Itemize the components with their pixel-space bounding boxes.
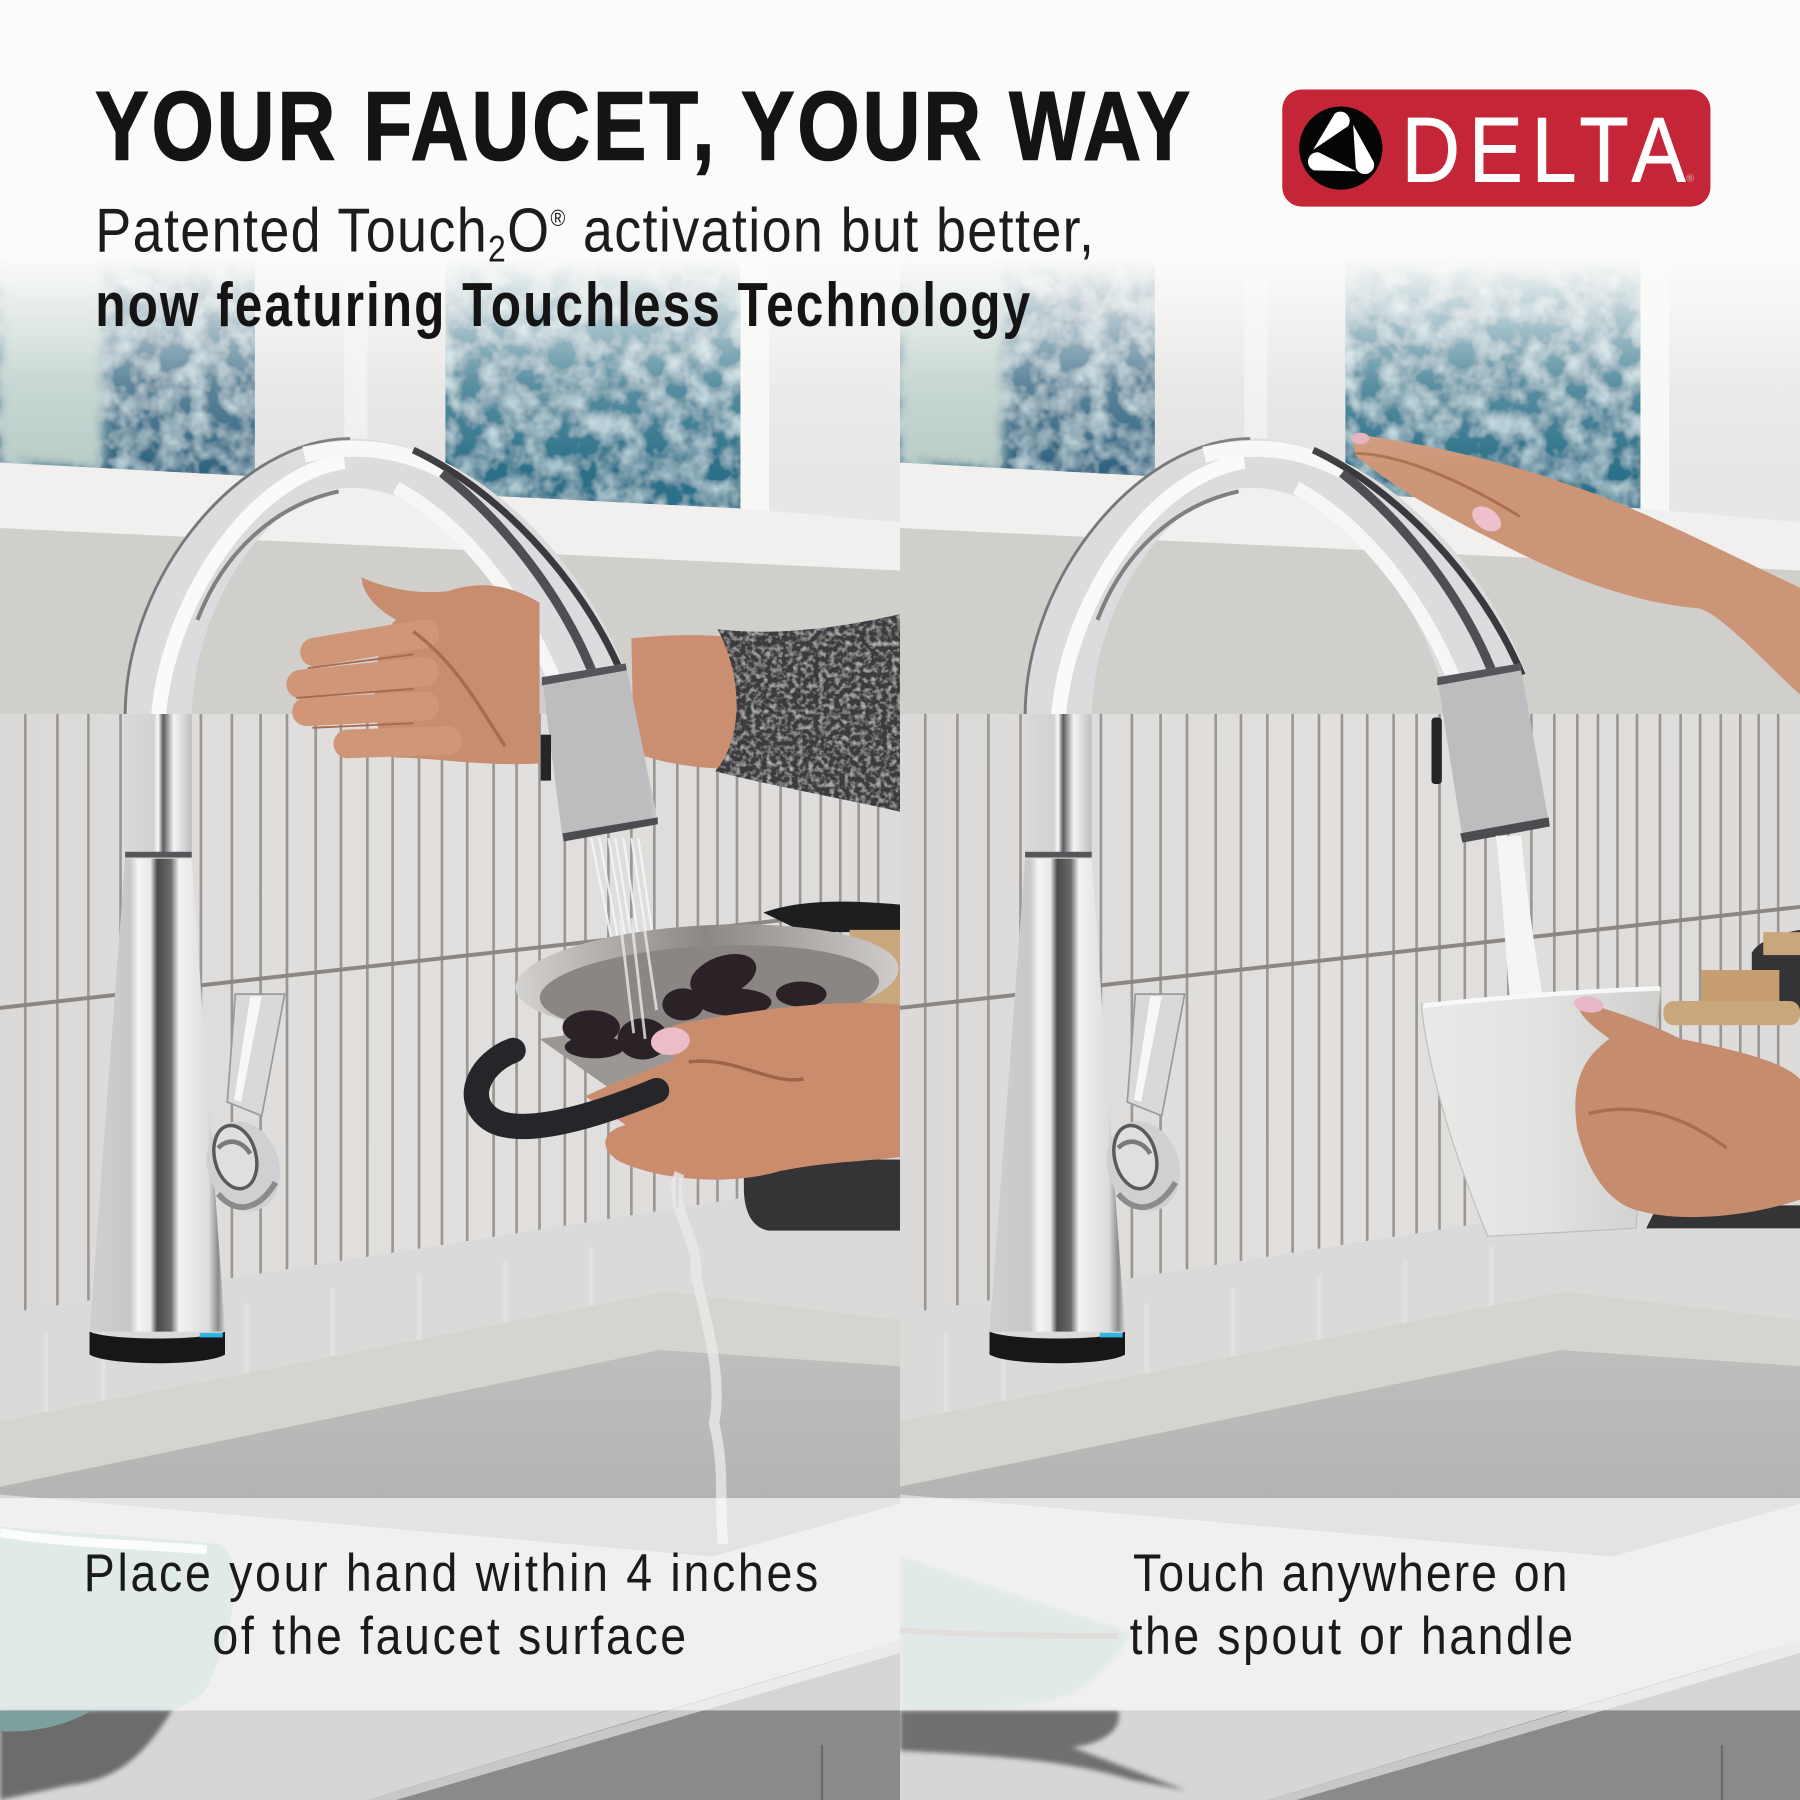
registered mark: ® [1686, 173, 1694, 184]
caption right: Touch anywhere on [1133, 1543, 1567, 1603]
spout head right [1432, 664, 1550, 843]
icon: faucet [990, 439, 1526, 1363]
panel: left photo, hand within 4 inches of faucet [0, 266, 900, 1800]
subtitle line one: O [507, 196, 549, 265]
subtitle line two: now featuring Touchless Technology [95, 270, 1030, 339]
caption band left [0, 1498, 900, 1710]
logo wordmark: DELTA [1402, 100, 1686, 202]
white mug [1421, 987, 1661, 1236]
caption right: the spout or handle [1130, 1606, 1573, 1666]
top fade panel [0, 0, 1800, 482]
pot and dark box on counter [744, 902, 900, 1231]
spray over berries [620, 918, 657, 1039]
subtitle line one: ® [550, 206, 565, 231]
spout head left [541, 664, 658, 841]
caption right [1130, 1543, 1573, 1666]
hand under sensor [296, 577, 900, 812]
subtitle line one: 2 [488, 230, 506, 270]
hand holding strainer [585, 1003, 900, 1180]
logo: Delta [1282, 90, 1710, 207]
strainer with berries [516, 924, 899, 1086]
subtitle line one: activation but better, [567, 196, 1094, 265]
caption left: of the faucet surface [212, 1606, 686, 1666]
caption band right [900, 1498, 1800, 1710]
title: YOUR FAUCET, YOUR WAY [95, 71, 1190, 180]
blurred bowl in foreground [0, 1527, 235, 1800]
tray, wood block and jar [1646, 930, 1800, 1228]
panel: right photo, touch spout [900, 266, 1800, 1800]
caption left [84, 1543, 818, 1666]
blurred plate in foreground [900, 1555, 1187, 1791]
falling water stream [676, 1173, 723, 1544]
spray water [590, 838, 653, 938]
solid water stream [1496, 836, 1543, 996]
subtitle line one: Patented Touch [95, 196, 487, 265]
icon: faucet [90, 439, 626, 1363]
strainer handle [476, 1050, 657, 1126]
hand on mug [1573, 994, 1800, 1217]
caption left: Place your hand within 4 inches [84, 1543, 818, 1603]
icon: Delta triangle mark [1299, 106, 1382, 190]
hand touching faucet arch [1351, 433, 1800, 695]
